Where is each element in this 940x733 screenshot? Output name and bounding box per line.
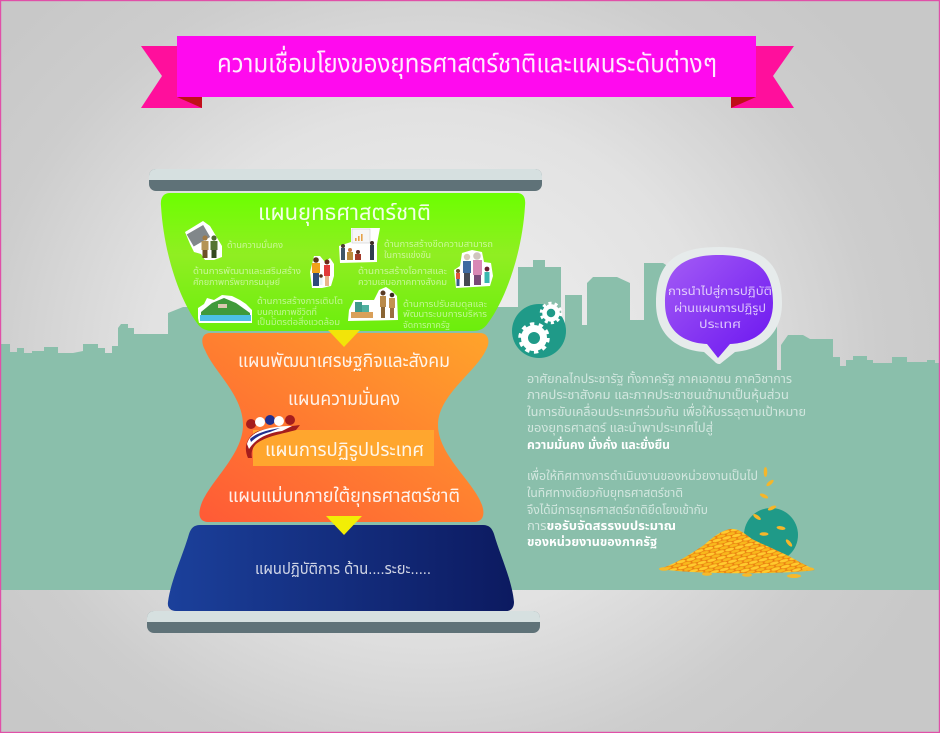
hourglass bottom bar (147, 611, 540, 633)
text block: people participation: ในการขับเคลื่อนประเทศร่วมกัน เพื่อให้บรรลุตามเป้าหมาย (527, 403, 806, 419)
bubble text: ประเทศ (699, 319, 741, 331)
environment label: เป็นมิตรต่อสิ่งแวดล้อม (257, 316, 340, 327)
title ribbon (141, 36, 794, 108)
bubble text: ผ่านแผนการปฏิรูป (674, 301, 766, 315)
reform plan: แผนการปฏิรูปประเทศ (265, 440, 424, 462)
icon: presentation (339, 228, 380, 263)
environment label: บนคุณภาพชีวิตที่ (257, 305, 317, 317)
environment label: ด้านการสร้างการเติบโต (257, 296, 343, 306)
public administration label: ด้านการปรับสมดุลและ (403, 299, 487, 309)
panel: intermediate plans (199, 333, 488, 522)
competitiveness label: ในการแข่งขัน (384, 250, 431, 260)
text block: people participation: ความมั่นคง มั่งคั่ง และยั่งยืน (527, 436, 670, 452)
public administration label: พัฒนาระบบการบริหาร (403, 309, 488, 319)
left ribbon fold (177, 97, 202, 108)
text block: people participation: ภาคประชาสังคม และภาคประชาชนเข้ามาเป็นหุ้นส่วน (527, 388, 789, 402)
icon: Thai flag ribbon with people (246, 415, 300, 458)
icon: landscape (198, 295, 252, 323)
text block: people participation: อาศัยกลไกประชารัฐ ทั้งภาครัฐ ภาคเอกชน ภาควิชาการ (527, 371, 792, 386)
left ribbon tail (141, 46, 202, 108)
human resources label: ศักยภาพทรัพยากรมนุษย์ (193, 277, 280, 287)
arrow: green to orange (328, 330, 360, 347)
bubble text: การนำไปสู่การปฏิบัติ (668, 284, 772, 298)
competitiveness label: ด้านการสร้างขีดความสามารถ (384, 239, 493, 249)
icon: officials and buildings (348, 287, 398, 321)
right ribbon fold (731, 97, 756, 108)
equality label: ความเสมอภาคทางสังคม (358, 277, 447, 287)
panel: national strategy (161, 193, 525, 331)
text block: budget: จึงได้มีการยุทธศาสตร์ชาติยึดโยงเข้ากับ (527, 503, 708, 517)
reform plan highlight (253, 430, 434, 466)
bubble fill (665, 255, 773, 358)
icon: coin pile (659, 467, 815, 578)
economic and social plan: แผนพัฒนาเศรษฐกิจและสังคม (238, 351, 450, 372)
equality label: ด้านการสร้างโอกาสและ (358, 266, 447, 276)
icon: gears (512, 304, 566, 358)
text block: budget: ของหน่วยงานของภาครัฐ (527, 535, 657, 549)
security label: ด้านความมั่นคง (227, 239, 283, 250)
icon: family (310, 256, 334, 288)
speech bubble (656, 247, 782, 364)
bubble outline (656, 247, 782, 364)
hourglass top bar (149, 169, 542, 191)
title: ความเชื่อมโยงของยุทธศาสตร์ชาติและแผนระดับต่างๆ (217, 45, 717, 79)
city skyline band (0, 260, 940, 590)
panel: action plan (168, 525, 514, 611)
ribbon band (177, 36, 756, 97)
icon: soldiers (185, 221, 222, 260)
right ribbon tail (731, 46, 794, 108)
icon: elderly family (454, 250, 493, 288)
action plan label: แผนปฏิบัติการ ด้าน....ระยะ..... (255, 561, 431, 578)
security plan: แผนความมั่นคง (288, 386, 400, 410)
national strategy heading: แผนยุทธศาสตร์ชาติ (258, 200, 431, 226)
text block: budget: ในทิศทางเดียวกับยุทธศาสตร์ชาติ (527, 486, 683, 500)
text block: budget: เพื่อให้ทิศทางการดำเนินงานของหน่วยงานเป็นไป (527, 467, 758, 483)
text block: people participation: ของยุทธศาสตร์ และนำพาประเทศไปสู่ (527, 421, 713, 435)
human resources label: ด้านการพัฒนาและเสริมสร้าง (193, 266, 301, 276)
public administration label: จัดการภาครัฐ (403, 320, 450, 330)
text block: budget: การขอรับจัดสรรงบประมาณ (527, 519, 670, 533)
master plan: แผนแม่บทภายใต้ยุทธศาสตร์ชาติ (228, 484, 460, 507)
arrow: orange to navy (326, 516, 362, 535)
